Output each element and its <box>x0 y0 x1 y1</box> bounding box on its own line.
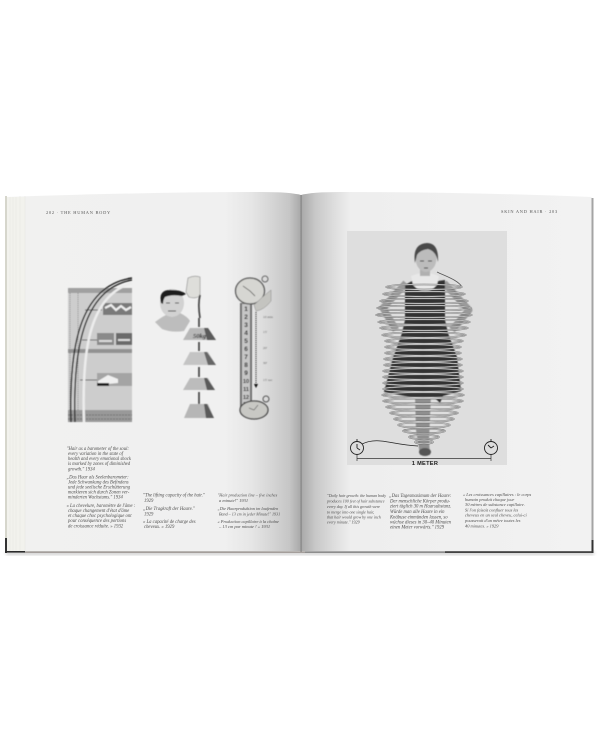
caption: hair production line: Band – 13 cm in jeder Minute!" 1931 <box>219 511 280 516</box>
caption: daily growth french: 30 mètres de substance capillaire. <box>465 502 525 507</box>
ruler: 11 <box>243 387 249 393</box>
ruler: 5 <box>244 338 248 345</box>
weight 2 <box>183 352 216 365</box>
page edge stack left <box>7 196 25 551</box>
caption: barometer of the soul: every variation in the state of <box>68 452 124 457</box>
book <box>5 192 594 555</box>
caption: daily growth english <box>326 493 386 525</box>
caption: barometer of the soul: chaque changement d'état d'âme <box>68 509 129 514</box>
caption: barometer of the soul: growth." 1934 <box>68 467 95 472</box>
hair coil <box>376 272 472 444</box>
caption: daily growth english: produces 100 feet of hair substance <box>326 498 385 503</box>
caption: lifting capacity <box>143 494 205 530</box>
caption: barometer of the soul: pour conséquence des portions <box>67 519 126 524</box>
illustration: man's head with hand and hanging weights <box>155 276 216 418</box>
caption: lifting capacity: cheveux. » 1929 <box>144 525 175 530</box>
woman figure <box>383 243 469 456</box>
weight 3 <box>183 378 215 390</box>
neck <box>420 266 430 276</box>
caption: barometer of the soul: "Hair as a barometer of the soul: <box>66 447 129 452</box>
caption: daily growth german <box>389 494 452 531</box>
caption: daily growth german: Würde man alle Haare in ein <box>390 510 445 515</box>
caption: hair production line: « Production capillaire à la chaîne <box>218 519 279 524</box>
caption: barometer of the soul: Jede Schwankung des Befindens <box>68 480 129 485</box>
caption: lifting capacity: 1929 <box>144 512 154 517</box>
arms <box>383 283 469 330</box>
ruler: 12 <box>243 395 249 401</box>
spine <box>300 195 302 552</box>
caption: daily growth french: humain produit chaque jour <box>465 497 515 502</box>
caption: daily growth english: that hair would grow by one inch <box>327 515 381 520</box>
weight 4 <box>184 404 214 418</box>
label: 1 meter: 1 METER <box>412 461 438 467</box>
ruler: 8 <box>244 362 248 369</box>
weight 1: 50kg <box>193 333 207 340</box>
caption: lifting capacity: „Die Tragkraft der Haare." <box>143 507 195 512</box>
legs <box>415 395 431 455</box>
caption: daily growth german: Knäbuse einmünden lassen, so <box>389 515 448 520</box>
ruler: 1 <box>244 306 248 313</box>
caption: hair production line: a minute!" 1931 <box>219 498 248 503</box>
time labels <box>263 315 273 382</box>
head <box>414 243 438 272</box>
right stopwatch <box>484 439 498 454</box>
measuring line <box>357 455 491 461</box>
ruler: 7 <box>244 354 248 361</box>
caption: barometer of the soul: markieren sich durch Zonen ver- <box>68 490 130 495</box>
ruler <box>240 303 252 408</box>
bottom watch <box>240 396 269 419</box>
caption: hair production line: "Hair production line – five inches <box>218 493 278 498</box>
caption: hair production line: – 13 cm par minute ! » 1931 <box>218 524 270 529</box>
photo background <box>347 231 507 465</box>
caption: barometer of the soul: et chaque choc psychologique ont <box>68 514 132 519</box>
caption: barometer of the soul: minderten Wachstums." 1934 <box>68 496 123 501</box>
caption: barometer of the soul: health and every emotional shock <box>68 457 132 462</box>
top watch <box>236 276 271 311</box>
running head left: 202 · THE HUMAN BODY <box>46 210 111 215</box>
ruler: 6 <box>244 346 248 353</box>
weight 1 <box>183 328 216 340</box>
ruler: 10 <box>243 379 249 385</box>
time labels: 10 min <box>263 315 273 319</box>
caption: daily growth french: « Les croissances capillaires : le corps <box>463 492 531 497</box>
hand <box>186 276 200 298</box>
ruler: 4 <box>244 330 248 337</box>
caption: daily growth french <box>463 492 531 528</box>
caption: lifting capacity: « La capacité de charge des <box>143 520 196 525</box>
dress <box>384 280 461 403</box>
caption: daily growth english: every day. If all this growth were <box>327 504 380 509</box>
portrait <box>155 289 190 332</box>
ruler: 2 <box>244 314 248 321</box>
string and hooks <box>199 295 200 404</box>
caption: hair production line <box>218 493 280 529</box>
ruler: 9 <box>244 370 248 377</box>
time labels: 15' <box>263 330 268 334</box>
feet shadow <box>419 448 431 456</box>
caption: barometer of the soul: und jede seelische Erschütterung <box>68 485 131 490</box>
caption: barometer of the soul: „Das Haar als Seelenbarometer: <box>66 475 129 480</box>
caption: daily growth german: „Das Tagesmaximum der Haare: <box>389 494 452 499</box>
time labels: 20' <box>263 346 268 350</box>
caption: daily growth french: pousserait d'un mètre toutes les <box>464 518 521 523</box>
collar <box>411 273 439 292</box>
cover edge <box>5 196 594 553</box>
caption: hair production line: „Die Haarproduktion im laufenden <box>218 506 278 512</box>
caption: daily growth english: every minute." 1929 <box>327 520 360 525</box>
caption: daily growth french: Si l'on faisait confluer tous les <box>465 507 519 512</box>
left page <box>7 192 301 551</box>
caption: lifting capacity: 1929 <box>144 499 154 504</box>
illustration: hair production stopwatch ruler <box>236 276 273 419</box>
time labels: 30' <box>263 361 268 365</box>
caption: barometer of the soul: de croissance réduite. » 1932 <box>68 524 124 529</box>
running head right: SKIN AND HAIR · 203 <box>501 209 558 214</box>
caption: daily growth german: wüchse dieses in 30–40 Minuten <box>390 520 452 526</box>
caption: daily growth french: 40 minutes. » 1929 <box>465 523 499 528</box>
left stopwatch and wire <box>350 439 418 454</box>
time labels: 15' sec <box>263 378 273 382</box>
arrow head <box>254 384 258 388</box>
caption: daily growth french: cheveux en un seul cheveu, celui-ci <box>465 512 527 518</box>
caption: daily growth english: to merge into one single hair, <box>327 509 374 515</box>
book shadow <box>6 551 594 555</box>
ruler: 13 <box>243 402 249 408</box>
photo: woman wrapped in a coil of hair <box>347 231 507 467</box>
illustration: hair growth barometer chart <box>68 278 132 422</box>
caption: daily growth german: Der menschliche Körper produ- <box>389 499 451 504</box>
caption: daily growth english: "Daily hair growth: the human body <box>327 493 386 498</box>
caption: barometer of the soul: « La chevelure, baromètre de l'âme : <box>66 504 136 509</box>
caption: lifting capacity: "The lifting capacity of the hair." <box>143 494 205 499</box>
right page <box>301 192 592 551</box>
caption: barometer of the soul: is marked by zones of diminished <box>68 462 131 467</box>
caption: daily growth german: einen Meter vorwärts." 1929 <box>390 526 445 531</box>
caption: daily growth german: ziert täglich 30 m Haarsubstanz. <box>389 505 451 510</box>
ruler: 3 <box>244 322 248 329</box>
caption: barometer of the soul <box>66 447 136 529</box>
dotted drop line <box>255 312 257 384</box>
